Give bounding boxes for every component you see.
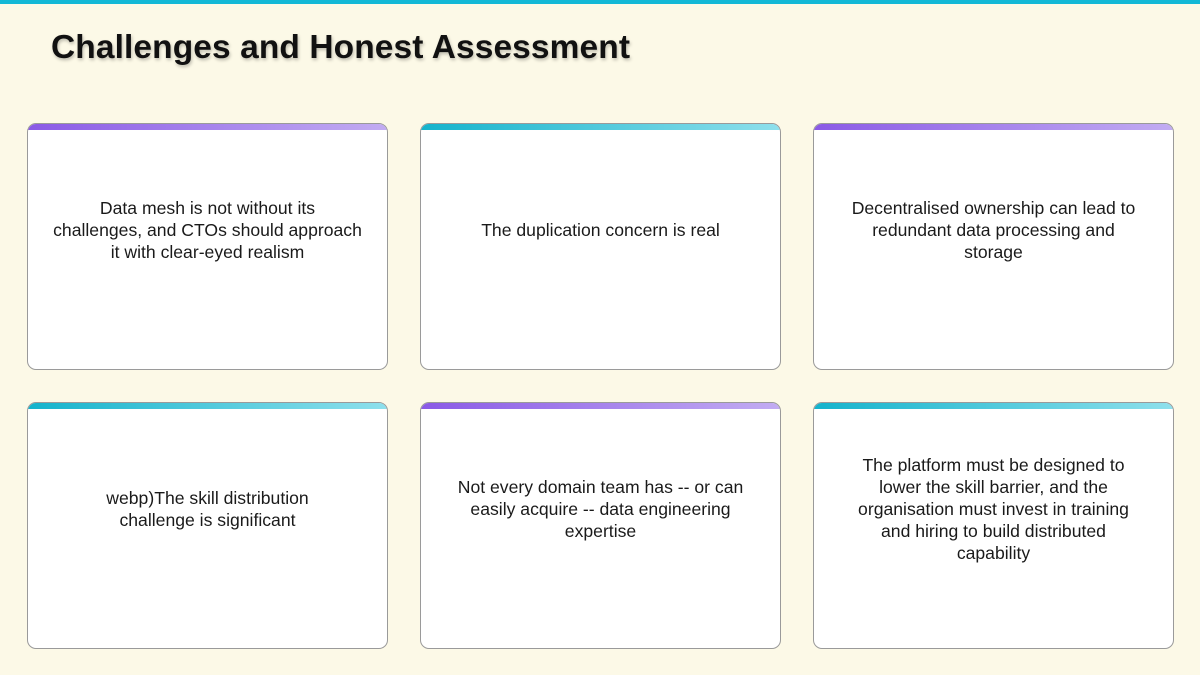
- card 6: organisation must invest in training: [858, 498, 1129, 518]
- card 6: and hiring to build distributed: [881, 520, 1106, 540]
- card 1: it with clear-eyed realism: [111, 242, 304, 262]
- card 1: [27, 123, 388, 370]
- card 4: [27, 402, 388, 649]
- title: Challenges and Honest Assessment: [51, 29, 630, 66]
- card 3: redundant data processing and: [872, 220, 1115, 240]
- card 6: [813, 402, 1174, 649]
- card 3: [813, 123, 1174, 370]
- card 2: [420, 123, 781, 370]
- card 5: Not every domain team has -- or can: [458, 476, 743, 496]
- card 1: challenges, and CTOs should approach: [53, 220, 362, 240]
- card 5: expertise: [565, 520, 636, 540]
- card 6: capability: [957, 542, 1030, 562]
- card 4: webp)The skill distribution: [106, 488, 309, 508]
- card 5: [420, 402, 781, 649]
- card 1: Data mesh is not without its: [100, 198, 315, 218]
- card 3: storage: [964, 242, 1023, 262]
- card 2: The duplication concern is real: [481, 220, 720, 240]
- card 6: lower the skill barrier, and the: [879, 476, 1108, 496]
- card 6: The platform must be designed to: [862, 454, 1125, 474]
- card 5: easily acquire -- data engineering: [470, 498, 731, 518]
- card 3: Decentralised ownership can lead to: [852, 198, 1135, 218]
- card 4: challenge is significant: [119, 510, 296, 530]
